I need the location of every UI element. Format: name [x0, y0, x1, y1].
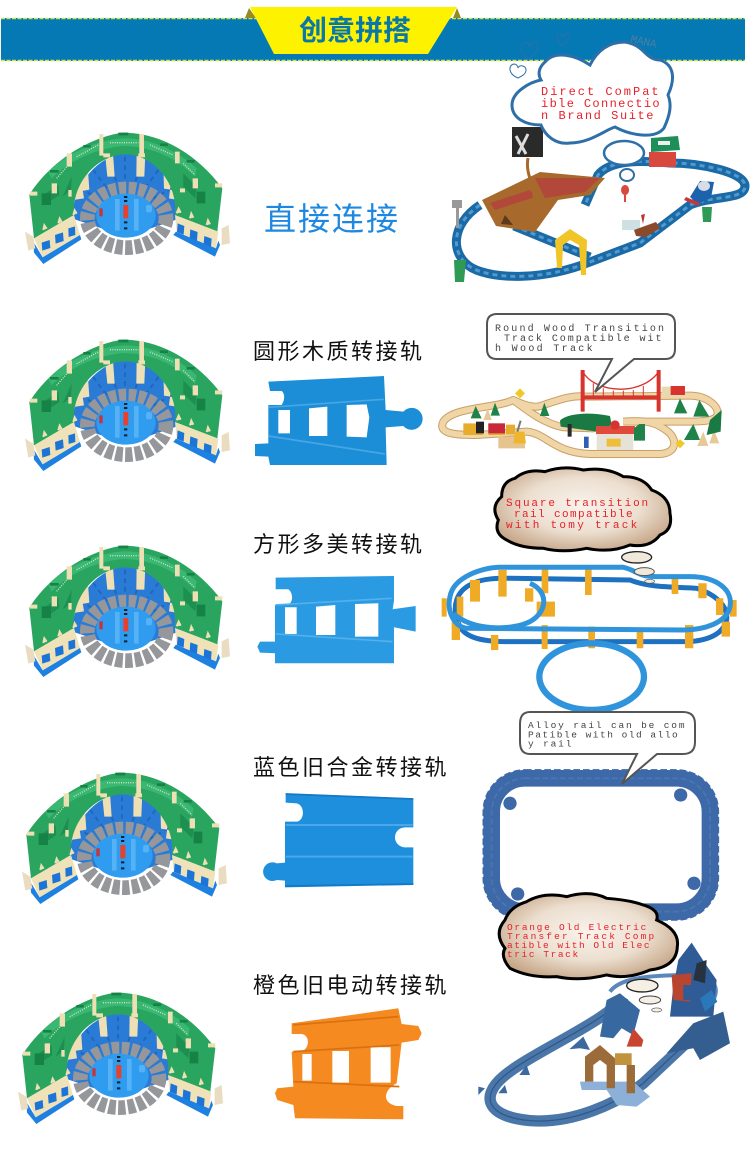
row 3 thought cloud: [495, 468, 671, 583]
row 5 thought cloud: [499, 894, 678, 1012]
trestle: [667, 1012, 730, 1060]
small ship: [622, 220, 640, 230]
bubble shape: [520, 712, 695, 784]
red sign: [621, 185, 629, 202]
bubble text: Round Wood Transition: [495, 323, 666, 335]
bubble text: Patible with old allo: [528, 730, 679, 740]
crossing loop: [453, 583, 544, 628]
lower ring: [539, 643, 644, 710]
blue track loop: [456, 161, 745, 276]
row 3 turntable: [25, 546, 230, 677]
header blue band: [1, 18, 745, 61]
header banner: [1, 7, 745, 61]
round wood adapter: [255, 376, 423, 465]
row 1 pirate ship track set: [452, 127, 745, 282]
cloud text: Transfer Track Comp: [507, 931, 656, 942]
crane and platform: [498, 437, 525, 448]
cloud text: Orange Old Electric: [507, 922, 648, 933]
green hill: [560, 414, 612, 432]
thomas engine: [690, 181, 714, 204]
row 4 turntable: [22, 773, 227, 904]
rock supports: [600, 993, 640, 1038]
alloy rail loop: [483, 770, 718, 920]
cloud text: Square transition: [506, 498, 650, 510]
lower dark track: [455, 578, 727, 642]
callout text: ible Connectio: [541, 97, 661, 111]
orange supports: [442, 565, 737, 650]
yellow arch: [555, 229, 587, 275]
bubble shape: [487, 314, 675, 392]
square tomy adapter: [257, 576, 416, 663]
green supports: [454, 207, 712, 282]
station base: [580, 1082, 650, 1107]
cloud text: rail compatible: [514, 509, 634, 521]
title: 创意拼搭: [299, 15, 411, 46]
row 5 label: 橙色旧电动转接轨: [253, 973, 449, 998]
long curved rail: [490, 997, 697, 1121]
red suspension bridge: [582, 370, 660, 412]
rail corner tabs: [503, 788, 701, 901]
cloud shape: [499, 894, 678, 1012]
upper curve: [610, 975, 716, 1000]
row 2 speech bubble: [487, 314, 675, 392]
upper light track: [449, 567, 730, 630]
signpost: [452, 200, 462, 228]
wooden arch: [585, 1045, 615, 1088]
row 4 label: 蓝色旧合金转接轨: [253, 755, 449, 780]
yellow title plate: [250, 7, 457, 54]
pirate flag: [512, 127, 543, 157]
wood track: [442, 396, 718, 454]
cloud text: tric Track: [507, 949, 580, 960]
red building: [672, 973, 692, 1002]
station: [651, 136, 680, 152]
blue mountain track set: [478, 943, 730, 1121]
bubble text: h Wood Track: [495, 343, 595, 355]
small thought loops: [604, 141, 644, 165]
mountain: [670, 943, 717, 1017]
row 2 turntable: [25, 340, 230, 471]
row 3 label: 方形多美转接轨: [253, 532, 425, 557]
row 1 cloud callout: [510, 34, 673, 181]
orange old electric adapter: [275, 1008, 422, 1119]
row 4 speech bubble: [520, 712, 695, 784]
toy train left: [463, 423, 515, 435]
blue old alloy adapter: [263, 793, 413, 887]
cloud text: with tomy track: [506, 520, 640, 532]
bubble text: y rail: [528, 738, 573, 750]
toy train right: [662, 387, 685, 397]
cloud shape: [495, 468, 671, 583]
wood railway set: [442, 370, 722, 454]
station: [596, 426, 635, 434]
callout text: Direct ComPat: [541, 85, 661, 99]
rail: [492, 778, 710, 912]
row 1 turntable: [25, 133, 230, 264]
trees: [471, 398, 709, 441]
blue engine: [700, 990, 717, 1012]
callout text: n Brand Suite: [541, 109, 655, 123]
pirate ship: [482, 172, 605, 232]
cloud text: atible with Old Elec: [507, 940, 651, 951]
red crane: [627, 1028, 643, 1047]
row 2 label: 圆形木质转接轨: [253, 339, 425, 364]
banner ribbon folds: [245, 8, 461, 18]
cloud outline: [512, 42, 673, 143]
row 1 label: 直接连接: [264, 201, 400, 237]
row 5 turntable: [18, 993, 223, 1124]
bubble text: Track Compatible wit: [504, 333, 663, 345]
sketch word: MANA: [629, 34, 658, 51]
road signs: [515, 388, 685, 448]
tomy elevated track: [442, 565, 737, 710]
sketch hearts: [510, 34, 570, 78]
bubble text: Alloy rail can be com: [528, 720, 686, 731]
